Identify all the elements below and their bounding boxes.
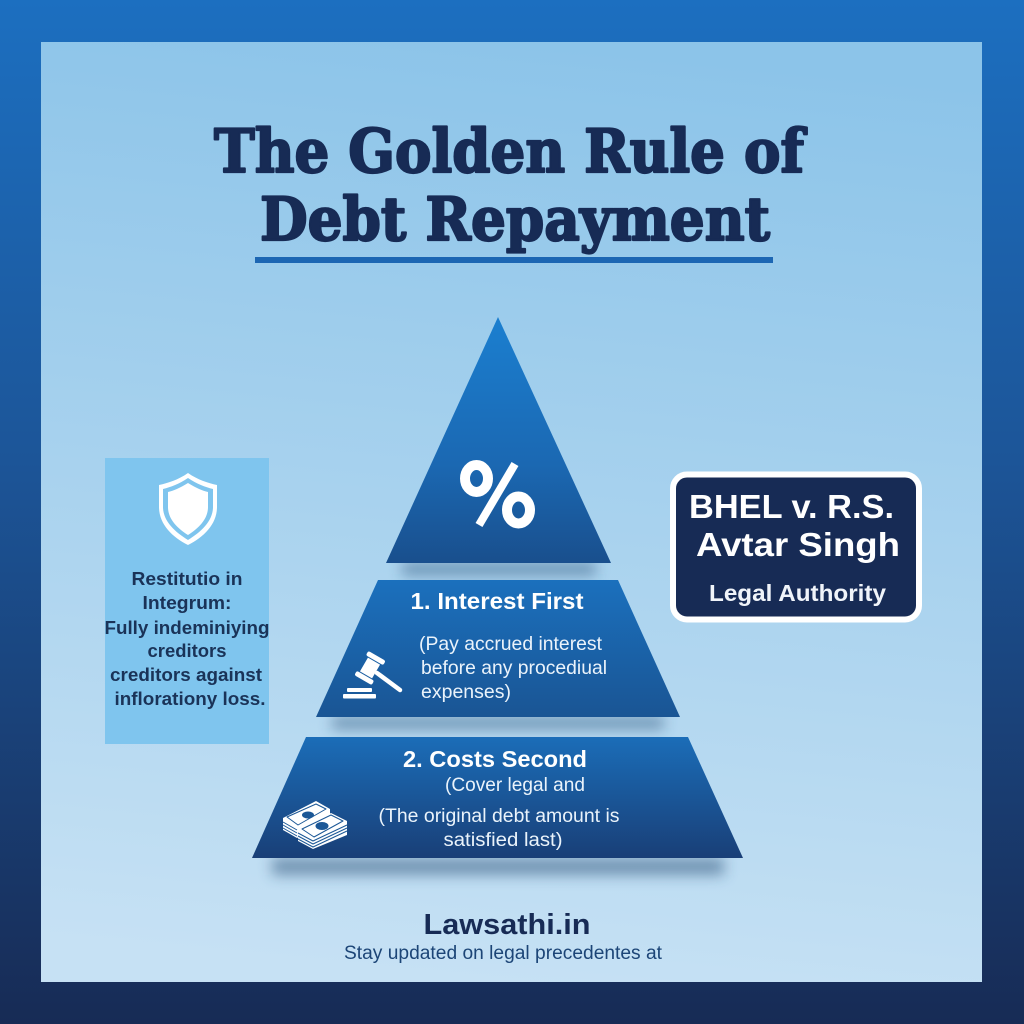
footer text: Stay updated on legal precedentes at bbox=[344, 943, 663, 964]
pyramid bbox=[252, 317, 743, 875]
panel text: creditors bbox=[148, 640, 226, 661]
panel text: Restitutio in bbox=[132, 568, 242, 589]
icon: shield bbox=[159, 473, 217, 545]
case name: BHEL v. R.S. bbox=[689, 488, 894, 525]
tier 1 text: before any procediual bbox=[421, 657, 607, 679]
tier 1 text bbox=[419, 633, 607, 703]
tier 2 text bbox=[378, 775, 620, 851]
case name bbox=[689, 488, 900, 563]
tier 2 heading: 2. Costs Second bbox=[403, 746, 587, 772]
tier 2 text: (Cover legal and bbox=[445, 775, 585, 796]
pyramid tier 1: interest first bbox=[316, 580, 680, 717]
tier 2 text: satisfied last) bbox=[444, 830, 562, 851]
tier 1 text: expenses) bbox=[421, 681, 511, 703]
title underline bbox=[255, 257, 773, 263]
pyramid tier 2: costs second bbox=[252, 737, 743, 858]
panel text: creditors against bbox=[110, 664, 262, 685]
icon: money stacks bbox=[283, 801, 347, 849]
footer brand: Lawsathi.in bbox=[424, 909, 590, 941]
title: The Golden Rule of bbox=[214, 117, 808, 187]
title: Debt Repayment bbox=[260, 185, 770, 255]
tier 1 heading: 1. Interest First bbox=[410, 588, 584, 614]
title bbox=[214, 117, 808, 255]
card caption: Legal Authority bbox=[709, 580, 886, 606]
panel: restitutio in integrum bbox=[104, 458, 270, 744]
panel text: Integrum: bbox=[142, 592, 232, 613]
case name: Avtar Singh bbox=[696, 526, 900, 563]
tier 1 text: (Pay accrued interest bbox=[419, 633, 603, 655]
pyramid shadows bbox=[272, 563, 724, 875]
tier 2 text: (The original debt amount is bbox=[378, 806, 620, 827]
pyramid top: percent bbox=[386, 317, 611, 563]
icon: percent bbox=[465, 464, 530, 525]
panel text: Fully indeminiying bbox=[104, 617, 270, 638]
panel text bbox=[104, 568, 270, 709]
panel text: inflorationy loss. bbox=[114, 688, 266, 709]
case card: legal authority bbox=[673, 474, 919, 620]
icon: gavel bbox=[343, 651, 400, 698]
